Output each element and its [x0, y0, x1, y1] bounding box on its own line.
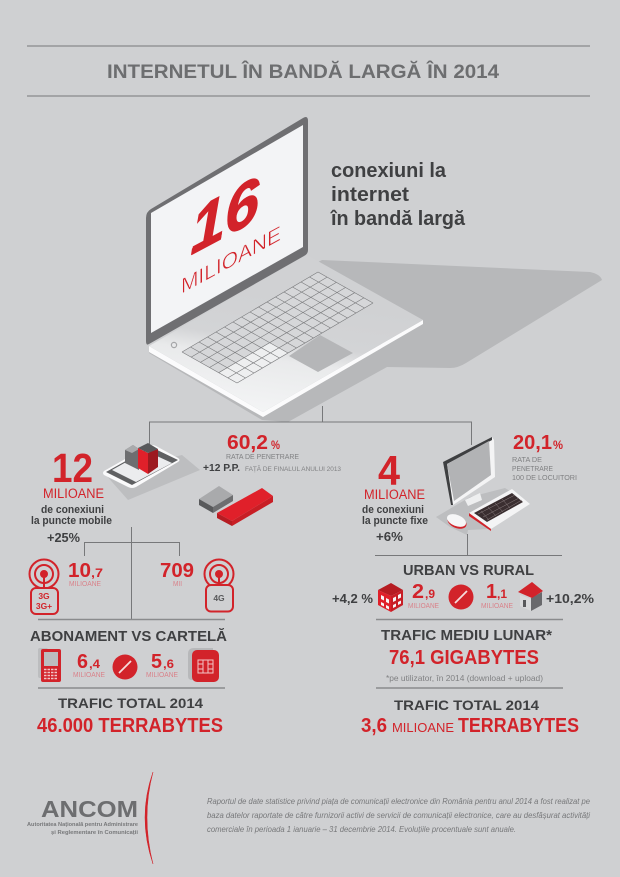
stat: 709 thousand: 709 — [160, 560, 194, 582]
stat: 20,1% penetration: 20,1 — [513, 432, 552, 454]
stat: 60,2% penetration: +12 P.P. — [203, 462, 240, 474]
stat: 2,9 million: 2 — [412, 581, 424, 603]
stat: urban growth: +4,2 % — [332, 592, 373, 606]
number: 12 million: la puncte mobile — [31, 515, 112, 527]
title: INTERNETUL ÎN BANDĂ LARGĂ ÎN 2014 — [107, 61, 499, 83]
stat: 60,2% penetration: % — [271, 438, 280, 452]
monthly average traffic: TRAFIC MEDIU LUNAR* — [381, 628, 552, 644]
traffic total fixed: 3,6 — [361, 715, 387, 737]
number: 12 million: +25% — [47, 530, 80, 545]
icon: house — [518, 582, 543, 611]
icon: usb modem blocks — [199, 486, 273, 526]
heading: urban vs rural: URBAN VS RURAL — [403, 562, 534, 579]
stat: 5,6 million: ,6 — [163, 657, 174, 671]
stat: 20,1% penetration: % — [553, 438, 563, 452]
stat: rural growth: +10,2% — [546, 592, 594, 606]
icon: versus slash — [112, 654, 138, 680]
stat: 20,1% penetration: RATA DE — [512, 455, 542, 464]
icon: versus slash — [448, 584, 474, 610]
stat: 709 thousand: MII — [173, 581, 182, 588]
monthly average traffic: *pe utilizator, în 2014 (download + upload) — [386, 673, 543, 683]
icon: 3G antenna: 3G+ — [36, 601, 52, 611]
traffic total fixed: MILIOANE — [392, 720, 454, 735]
traffic total mobile: 46.000 TERRABYTES — [37, 715, 223, 737]
icon: 3G antenna — [30, 560, 58, 614]
logo: ANCOM: ANCOM — [41, 796, 138, 822]
stat: 10,7 million: 10 — [68, 560, 91, 582]
footer note: Raportul de date statistice privind piața de comunicații electronice din România pentru anul 2014 a fost realizat pe — [207, 797, 591, 806]
heading: conexiuni: conexiuni la — [331, 159, 447, 182]
stat: 20,1% penetration: PENETRARE — [512, 464, 553, 473]
keyboard — [182, 272, 373, 383]
monthly average traffic: 76,1 GIGABYTES — [389, 647, 539, 669]
connector tree: fixed — [375, 534, 562, 556]
number: 12 million — [31, 445, 112, 545]
stat: 10,7 million: ,7 — [91, 566, 103, 580]
icon: desktop computer — [436, 437, 530, 535]
number: 4 million: 4 — [378, 447, 401, 494]
monthly average traffic — [381, 628, 552, 683]
stat: 5,6 million: MILIOANE — [146, 672, 178, 679]
panel: fixed connections — [332, 432, 594, 737]
icon: 4G antenna — [204, 560, 234, 612]
stat: 6,4 million: 6 — [77, 651, 88, 673]
heading: abonament vs cartela: ABONAMENT VS CARTELĂ — [30, 628, 228, 645]
stat: 5,6 million: 5 — [151, 651, 162, 673]
laptop illustration — [146, 117, 602, 422]
stat: 60,2% penetration: FAȚĂ DE FINALUL ANULUI 2013 — [245, 464, 341, 473]
logo: ANCOM: și Reglementare în Comunicații — [51, 830, 138, 836]
connector tree: mobile — [84, 527, 180, 619]
traffic total mobile: TRAFIC TOTAL 2014 — [58, 695, 203, 711]
traffic total fixed: TERRABYTES — [458, 715, 579, 737]
stat: 6,4 million: ,4 — [89, 657, 100, 671]
stat: 10,7 million — [68, 560, 103, 588]
number: 12 million: MILIOANE — [43, 486, 104, 501]
footer note: baza datelor raportate de către furnizorii activi de servicii de comunicații electronice, care au desfășurat activități — [207, 811, 590, 820]
number: 12 million: de conexiuni — [41, 504, 104, 516]
logo: ANCOM — [27, 772, 153, 864]
stat: 2,9 million: ,9 — [425, 587, 435, 601]
stat: 10,7 million: MILIOANE — [69, 581, 101, 588]
number: 4 million: de conexiuni — [362, 504, 424, 516]
icon: sim card — [188, 648, 219, 682]
laptop lid — [146, 117, 308, 345]
stat: 20,1% penetration: 100 DE LOCUITORI — [512, 473, 577, 482]
laptop screen — [151, 125, 303, 333]
stat: 1,1 million — [481, 581, 513, 610]
stat: 6,4 million: MILIOANE — [73, 672, 105, 679]
heading: conexiuni — [330, 159, 466, 230]
stat: 6,4 million — [73, 651, 105, 679]
traffic total fixed — [361, 697, 579, 737]
stat: 2,9 million — [408, 581, 439, 610]
stat: 60,2% penetration: RATA DE PENETRARE — [226, 452, 299, 461]
icon: mobile handset — [38, 648, 61, 682]
stat: 60,2% penetration — [203, 432, 341, 474]
number on screen: MILIOANE — [181, 221, 281, 299]
stat: 60,2% penetration: 60,2 — [227, 432, 268, 454]
heading: conexiuni: internet — [331, 183, 409, 206]
touchpad — [289, 335, 353, 372]
heading: conexiuni: în bandă largă — [330, 207, 466, 230]
icon: apartment building — [378, 583, 403, 612]
traffic total fixed: TRAFIC TOTAL 2014 — [394, 697, 539, 713]
number: 4 million: MILIOANE — [364, 487, 425, 502]
number: 12 million: 12 — [52, 445, 93, 491]
number: 4 million: +6% — [376, 529, 403, 544]
stat: 20,1% penetration — [512, 432, 577, 482]
stat: 1,1 million: ,1 — [497, 587, 507, 601]
icon: 4G antenna: 4G — [213, 593, 225, 603]
traffic total mobile — [37, 695, 223, 737]
stat: 2,9 million: MILIOANE — [408, 603, 439, 610]
number: 4 million — [362, 447, 428, 544]
laptop base — [149, 255, 423, 417]
number on screen: 16 — [191, 162, 260, 269]
stat: 1,1 million: 1 — [486, 581, 497, 603]
connector tree: main — [150, 406, 472, 445]
panel: mobile connections — [30, 432, 341, 737]
icon: 3G antenna: 3G — [38, 591, 50, 601]
laptop shadow — [149, 260, 602, 422]
number: 4 million: la puncte fixe — [362, 515, 428, 527]
footer note: comerciale în perioada 1 ianuarie – 31 decembrie 2014. Evoluțiile procentuale sunt anuale. — [207, 825, 516, 834]
logo: ANCOM: Autoritatea Națională pentru Administrare — [27, 822, 138, 828]
footer note — [207, 797, 591, 834]
stat: 5,6 million — [146, 651, 178, 679]
icon: phone with bars — [103, 443, 200, 500]
stat: 1,1 million: MILIOANE — [481, 603, 513, 610]
number on screen — [181, 162, 281, 299]
